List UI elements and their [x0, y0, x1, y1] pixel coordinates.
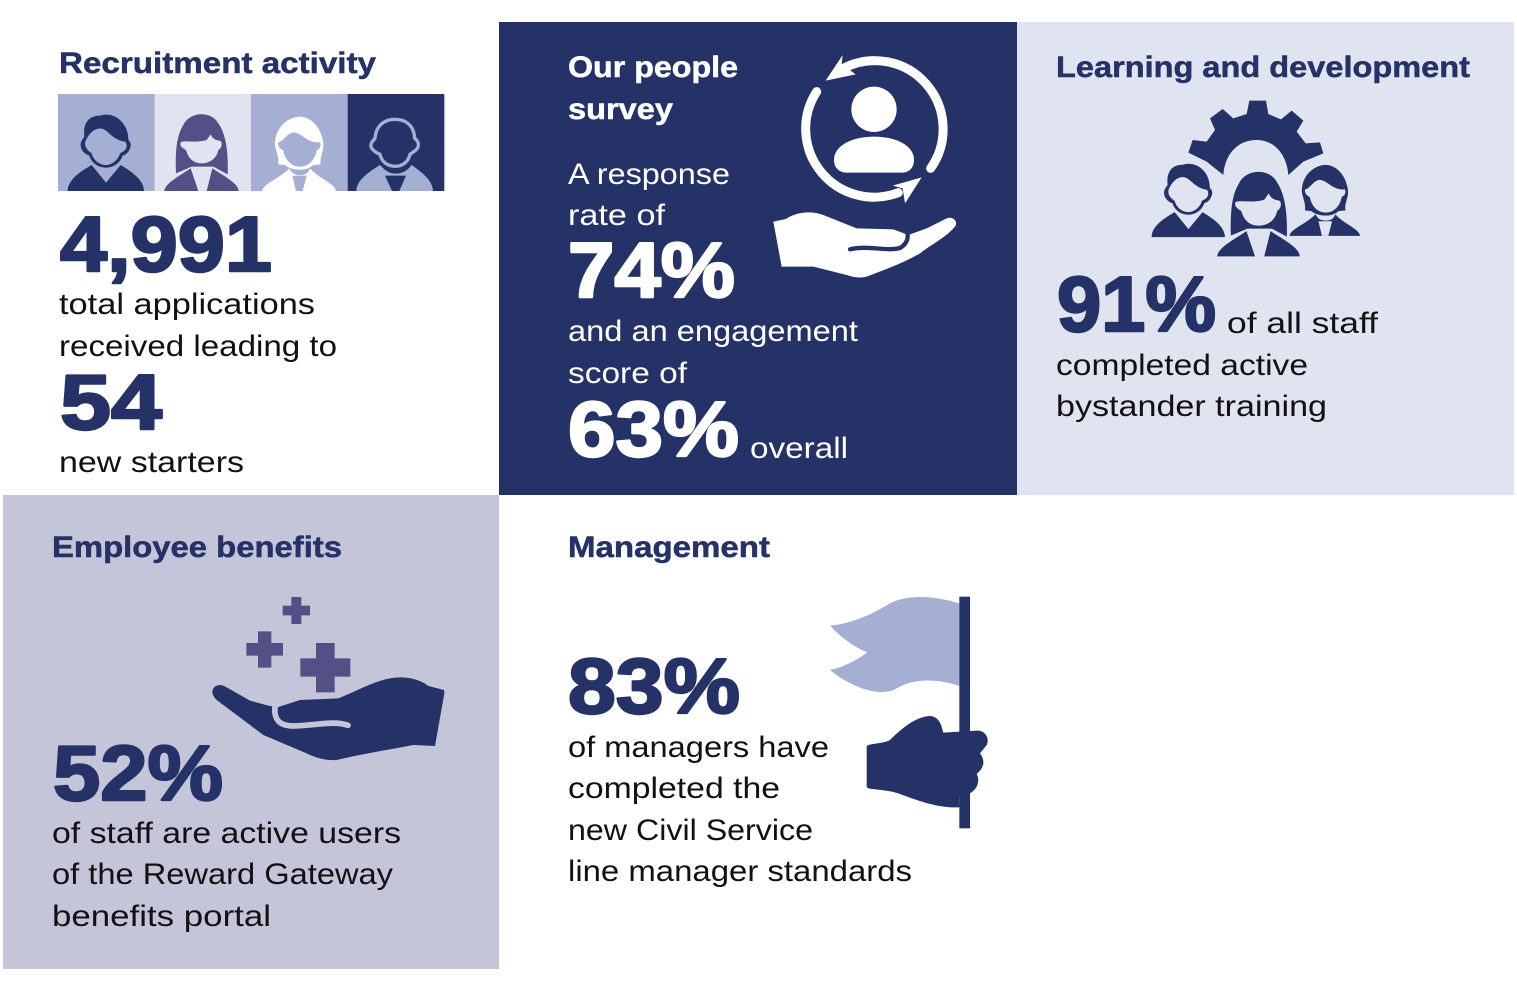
- heading: learning and development: Learning and development: [1056, 51, 1470, 84]
- text: of all staff completed active bystander training: bystander training: [1056, 390, 1327, 423]
- avatar: man with headset outline: [356, 119, 433, 191]
- text: of managers have completed the new Civil Service line manager standards: [568, 731, 912, 888]
- text: a response rate of: [568, 158, 730, 232]
- stat: 83%: 83%: [568, 642, 740, 730]
- stat: 54: 54: [60, 358, 162, 446]
- person: centre woman: [1217, 171, 1300, 256]
- text: of managers have completed the new Civil Service line manager standards: new Civil Service: [568, 814, 813, 847]
- text: of all staff completed active bystander training: of all staff: [1227, 307, 1379, 340]
- text: of all staff completed active bystander training: [1056, 307, 1379, 423]
- text: new starters: new starters: [59, 446, 244, 479]
- stat: 52%: 52%: [53, 729, 223, 817]
- heading: our people survey: [568, 51, 738, 126]
- text: of staff are active users of the Reward Gateway benefits portal: of the Reward Gateway: [52, 858, 393, 891]
- text: and an engagement score of: score of: [568, 357, 688, 390]
- icon: person in cycle held over hand: [773, 55, 956, 277]
- stat: 63%: 63%: [568, 385, 739, 473]
- text: of staff are active users of the Reward Gateway benefits portal: benefits portal: [52, 900, 271, 933]
- panel: management: [568, 531, 988, 888]
- stat: 91%: 91%: [1057, 260, 1216, 348]
- panel: recruitment activity: [3, 22, 499, 495]
- heading: recruitment activity: Recruitment activity: [59, 47, 376, 80]
- text: of staff are active users of the Reward Gateway benefits portal: [52, 817, 401, 933]
- stat: 74%: 74%: [568, 226, 735, 314]
- heading: management: Management: [568, 531, 770, 564]
- heading: our people survey: Our people: [568, 51, 738, 84]
- text: total applications received leading to: received leading to: [59, 330, 337, 363]
- stat: 4,991: 4,991: [60, 200, 272, 288]
- panel: our people survey: [499, 22, 1017, 495]
- person: left man: [1152, 164, 1225, 237]
- text: of staff are active users of the Reward Gateway benefits portal: of staff are active users: [52, 817, 401, 850]
- text: of managers have completed the new Civil Service line manager standards: completed the: [568, 772, 780, 805]
- panel: learning and development: [1017, 22, 1514, 495]
- text: total applications received leading to: [59, 288, 337, 363]
- panel: employee benefits: [3, 495, 499, 969]
- text: of managers have completed the new Civil Service line manager standards: line manager standards: [568, 855, 912, 888]
- text: overall: overall: [750, 432, 848, 465]
- icon: hand with plus signs: [212, 597, 444, 760]
- icon: team with gear: [1152, 101, 1360, 256]
- icon strip: four staff avatars: [58, 94, 444, 191]
- avatar: woman with short hair: [262, 117, 336, 191]
- text: and an engagement score of: [568, 315, 859, 390]
- avatar: woman with long hair: [164, 114, 239, 191]
- text: a response rate of: A response: [568, 158, 730, 191]
- text: a response rate of: rate of: [568, 199, 666, 232]
- icon: hand holding flag: [830, 597, 988, 828]
- avatar: man: [68, 115, 144, 191]
- heading: our people survey: survey: [568, 93, 673, 126]
- person: right woman: [1289, 165, 1360, 236]
- text: of all staff completed active bystander training: completed active: [1056, 349, 1308, 382]
- heading: employee benefits: Employee benefits: [52, 531, 342, 564]
- text: of managers have completed the new Civil Service line manager standards: of managers have: [568, 731, 829, 764]
- text: total applications received leading to: total applications: [59, 288, 315, 321]
- text: and an engagement score of: and an engagement: [568, 315, 859, 348]
